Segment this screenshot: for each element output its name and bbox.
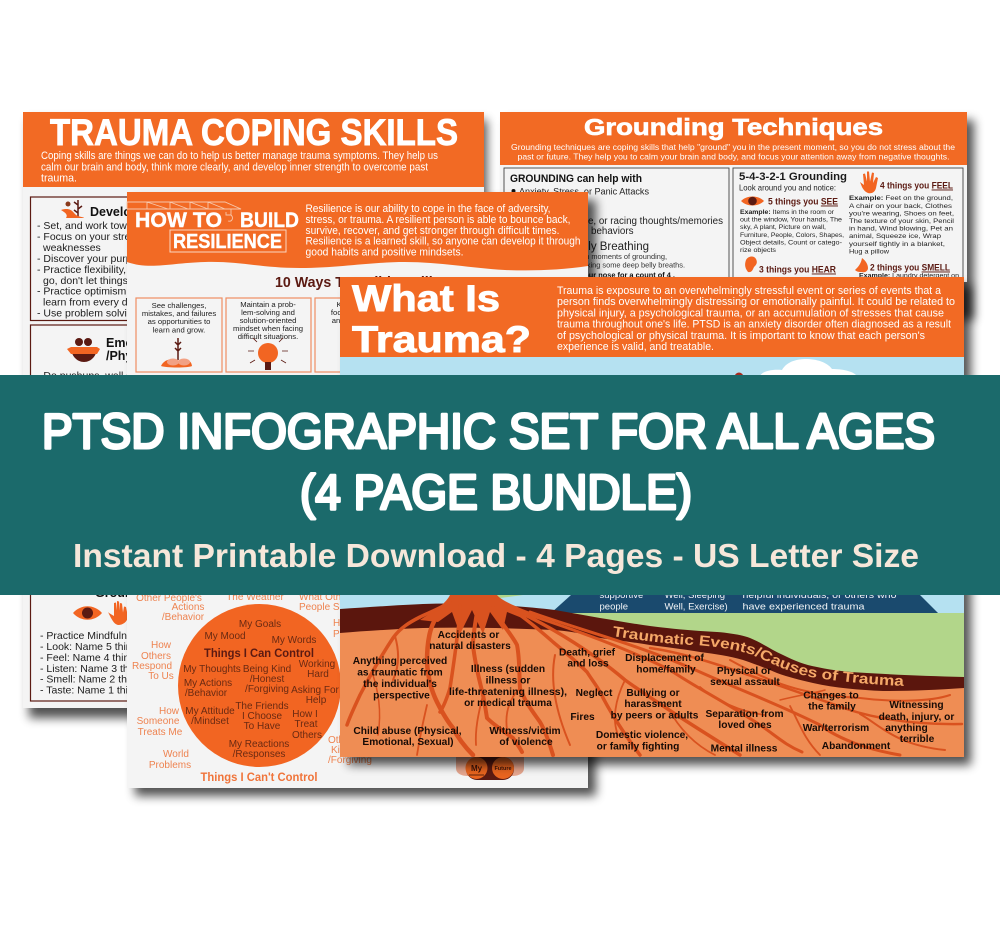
title: what is trauma: Trauma?	[352, 319, 531, 360]
list item: anxiety: Anxiety, Stress, or Panic Attacks	[519, 186, 649, 198]
labels: inside circle: /Honest	[250, 674, 284, 685]
illustration: sky, hill and soil	[340, 357, 964, 757]
card: see challenges: learn and grow.	[153, 326, 205, 334]
panel: Trauma Coping Skills page	[23, 112, 487, 718]
labels: inside circle: Asking For	[291, 685, 340, 696]
labels: outside circle: /Forgiving	[328, 755, 372, 766]
icon: my future tree	[456, 757, 524, 780]
text: trauma definition: experience is valid, and treatable.	[557, 341, 714, 353]
icon: red flower top	[735, 372, 743, 375]
text: see example: rize objects	[740, 247, 777, 254]
card: keep focused: Keep yourself	[336, 300, 384, 309]
labels: causes of trauma: natural disasters	[429, 641, 511, 652]
text: trauma definition: trauma throughout one's life. PTSD is an anxiety disorder often diagnosed as a result	[557, 318, 951, 330]
heading: develop resilience: Develop Resilience	[90, 205, 204, 219]
heading: smell: 2 things you SMELL	[870, 262, 950, 272]
card: keep focused	[315, 298, 405, 372]
icon: plant in hands	[61, 200, 84, 218]
labels: outside circle	[132, 592, 372, 771]
text: feel example	[849, 195, 955, 256]
list: grounding senses: - Feel: Name 4 things you feel	[40, 652, 180, 664]
labels: inside circle: /Mindset	[191, 716, 229, 727]
text: belly breathing description: In moments of grounding,	[583, 252, 667, 261]
icon: my future tree: My	[471, 764, 483, 773]
labels: outside circle: Kind	[331, 745, 351, 756]
text: see example: sky, A plant, Picture on wall,	[740, 224, 826, 231]
banner: bundle title	[0, 375, 1000, 595]
icon: crane truss	[127, 202, 241, 221]
labels: causes of trauma: Physical or	[717, 666, 771, 677]
labels: inside circle: Being Kind	[243, 664, 291, 675]
icon: plant in hands	[161, 338, 192, 368]
labels: inside circle: Treat	[295, 719, 318, 730]
card: keep focused: for what	[346, 324, 375, 333]
list: resilience tips: - Practice flexibility, stay calm, let	[37, 264, 190, 276]
text: protective factors	[600, 595, 896, 612]
icon: my future tree: Future	[494, 766, 512, 772]
title: grounding techniques: Grounding Techniques	[584, 114, 883, 140]
labels: causes of trauma: terrible	[900, 734, 935, 745]
text: trauma definition: Trauma is exposure to an overwhelmingly stressful event or series of events that a	[557, 285, 942, 297]
card: keep focused: focused on goals	[331, 308, 389, 317]
title: build: BUILD	[240, 209, 299, 232]
labels: causes of trauma: Anything perceived	[353, 656, 447, 667]
title: resilience badge: RESILIENCE	[173, 231, 282, 253]
labels: inside circle: My Actions	[184, 678, 232, 689]
soil: brown band	[340, 603, 964, 691]
heading: grounding: Grounding	[95, 586, 159, 600]
text: feel example: The texture of your skin, Pencil	[849, 218, 955, 225]
heading: see: 5 things you SEE	[768, 196, 838, 206]
text: grounding intro: past or future. They help you to calm your brain and body, and focus your attention away from negative thoughts.	[518, 152, 950, 162]
heading: emotional physical: Emotional	[106, 336, 166, 350]
icon: cloud	[760, 359, 857, 376]
tree roots	[347, 595, 962, 755]
labels: outside circle: How	[159, 706, 180, 717]
card: problem solving mindset	[226, 298, 311, 372]
labels: inside circle: /Responses	[233, 749, 285, 760]
heading: traumatic events path: Traumatic Events/Causes of Trauma	[614, 626, 904, 686]
labels: causes of trauma: War/terrorism	[803, 723, 869, 734]
list: resilience tips	[37, 220, 200, 320]
list: grounding senses: - Practice Mindfulness	[40, 630, 143, 642]
text: protective factors: people	[600, 602, 628, 612]
box: grounding can help with	[504, 168, 729, 282]
labels: causes of trauma: the family	[808, 702, 856, 712]
list: resilience tips: - Practice optimism, stay positive,	[37, 286, 193, 298]
labels: inside circle: /Forgiving	[245, 684, 289, 695]
labels: outside circle: Treats Me	[138, 727, 183, 738]
text: protective factors: Well, Exercise)	[664, 602, 728, 612]
labels: causes of trauma: harassment	[624, 699, 682, 710]
text: feel example: you're wearing, Shoes on feet,	[849, 210, 954, 218]
labels: inside circle: Hard	[307, 669, 329, 680]
heading: things I can't control: Things I Can't Control	[200, 770, 318, 784]
card: see challenges: as opportunities to	[148, 317, 210, 326]
labels: outside circle: World	[163, 749, 189, 760]
list: grounding senses: - Listen: Name 3 things you hear	[40, 663, 192, 675]
text: coping skills intro: Coping skills are things we can do to help us better manage trauma symptoms. They help us	[41, 150, 438, 162]
soil: orange ground	[340, 620, 964, 757]
labels: inside circle: My Attitude	[185, 706, 235, 717]
text: resilience definition: good habits and positive mindsets.	[306, 246, 464, 258]
text: resilience definition: Resilience is our ability to cope in the face of adversity,	[306, 203, 551, 215]
icon: ear	[745, 256, 757, 272]
labels: outside circle: People	[333, 629, 365, 640]
panel: How to Build Resilience page	[127, 192, 596, 796]
labels: causes of trauma: Witnessing	[889, 700, 944, 711]
text: trauma definition: person finds overwhelmingly distressing or emotionally painful. It could be related to	[557, 296, 955, 308]
text: protective factors: helpful individuals, or others who	[742, 590, 896, 601]
labels: causes of trauma: illness or	[486, 676, 530, 686]
panel: What Is Trauma page	[340, 277, 979, 773]
title: trauma coping skills: TRAUMA COPING SKILLS	[50, 112, 458, 153]
labels: inside circle: I Choose	[242, 711, 282, 722]
labels: causes of trauma: Child abuse (Physical,	[353, 726, 462, 737]
labels: causes of trauma: death, injury, or	[879, 712, 954, 723]
text: feel example: Example: Feet on the ground,	[849, 195, 953, 202]
list: grounding senses	[40, 630, 193, 696]
text: feel example: in hand, Wind blowing, Pet an	[849, 226, 953, 232]
labels: causes of trauma	[353, 630, 954, 754]
text: grounding intro: Grounding techniques are coping skills that help "ground" you in the present moment, so you do not stress about the	[511, 142, 955, 152]
list: resilience tips: - Discover your purpose	[37, 253, 149, 265]
labels: outside circle: Problems	[149, 760, 191, 771]
icon: eye	[73, 606, 102, 620]
labels: causes of trauma: Neglect	[576, 688, 613, 699]
list: resilience tips: - Set, and work towards goals	[37, 220, 175, 232]
labels: outside circle: How	[151, 640, 172, 651]
labels: inside circle: Others	[292, 730, 322, 741]
text: coping skills intro: trauma.	[41, 172, 77, 184]
text: see example	[740, 209, 844, 254]
text: see example: Furniture, People, Colors, Shapes,	[740, 232, 844, 239]
list item: behaviors: behaviors	[591, 226, 634, 237]
labels: inside circle: The Friends	[235, 701, 289, 712]
labels: causes of trauma: Changes to	[803, 690, 859, 702]
labels: causes of trauma: by peers or adults	[611, 710, 699, 722]
text: belly breathing description: through your nose for a count of 4 ,	[550, 270, 675, 280]
text: trauma definition: of psychological or physical trauma. It is important to know that each person's	[557, 330, 925, 342]
text: feel example: Hug a pillow	[849, 248, 889, 256]
labels: inside circle: How I	[292, 709, 318, 720]
text: resilience definition: stress, or trauma. A resilient person is able to bounce back,	[306, 214, 571, 226]
icon: hand	[860, 172, 878, 193]
labels: causes of trauma: or medical trauma	[464, 698, 552, 709]
labels: causes of trauma: as traumatic from	[357, 668, 443, 678]
chart: things I can control circle	[178, 604, 341, 767]
labels: causes of trauma: Bullying or	[626, 688, 680, 699]
labels: outside circle: Others	[141, 651, 171, 662]
icon: smiling face	[67, 338, 100, 362]
text: protective factors: Well, Sleeping	[664, 590, 725, 601]
heading: things I can control: Things I Can Control	[204, 648, 314, 660]
icon: nose	[855, 258, 868, 272]
text: look around: Look around you and notice:	[739, 182, 836, 192]
labels: causes of trauma: anything	[885, 723, 928, 734]
text: resilience definition	[306, 203, 581, 258]
labels: outside circle: The Weather	[226, 592, 284, 603]
heading: 4 page bundle: (4 PAGE BUNDLE)	[300, 466, 692, 520]
labels: inside circle	[183, 619, 340, 760]
labels: causes of trauma: loved ones	[718, 720, 772, 731]
icon: hand	[108, 601, 128, 625]
infographic bundle preview	[0, 112, 1000, 804]
text: see example: out the window, Your hands, The	[740, 216, 842, 224]
text: smell example: Example: Laundry detergent on	[859, 272, 959, 280]
hill: green	[497, 595, 964, 680]
text: feel example: yourself tightly in a blanket,	[849, 241, 945, 248]
labels: causes of trauma: life-threatening illness),	[449, 687, 567, 698]
list: grounding senses: - Taste: Name 1 thing you taste	[40, 684, 185, 696]
heading: belly breathing: Belly Breathing	[572, 241, 649, 253]
text: resilience definition: survive, recover, and get stronger through difficult times.	[306, 225, 560, 237]
labels: causes of trauma: Mental illness	[711, 744, 778, 754]
heading: PTSD infographic set: PTSD INFOGRAPHIC SET FOR ALL AGES	[42, 405, 935, 459]
text: coping skills intro: calm our brain and body, think more clearly, and develop inner strength to overcome past	[41, 162, 428, 174]
panel: Grounding Techniques page	[500, 112, 974, 320]
labels: inside circle: /Behavior	[185, 688, 228, 699]
labels: causes of trauma: Accidents or	[438, 630, 499, 641]
labels: causes of trauma: perspective	[373, 690, 430, 702]
text: grounding intro	[511, 142, 955, 162]
text: see example: Object details, Count or catego-	[740, 240, 842, 246]
title: what is trauma	[352, 278, 531, 360]
card: see challenges: See challenges,	[152, 301, 206, 310]
trapezoid: protective factors	[551, 595, 938, 613]
list: resilience tips: weaknesses	[42, 242, 101, 254]
heading: physical: /Physical	[106, 349, 160, 363]
text: trauma definition	[557, 285, 955, 353]
list: grounding senses: - Smell: Name 2 things you smell	[40, 674, 193, 686]
list: grounding senses: - Look: Name 5 things you see	[40, 641, 183, 653]
heading: feel: 4 things you FEEL	[880, 180, 953, 190]
labels: outside circle: What Other	[299, 592, 351, 603]
labels: causes of trauma: or family fighting	[597, 742, 679, 752]
card: see challenges	[136, 298, 222, 372]
labels: causes of trauma: Witness/victim	[489, 726, 561, 737]
card: problem solving mindset: mindset when facing	[233, 324, 303, 333]
text: resilience definition: Resilience is a learned skill, so anyone can develop it through	[306, 236, 581, 248]
list item: pushups: - Do pushups, wall sits	[37, 370, 142, 382]
labels: outside circle: Respond	[132, 661, 172, 672]
labels: outside circle: /Behavior	[162, 612, 205, 623]
labels: inside circle: My Reactions	[229, 739, 289, 750]
labels: causes of trauma: Illness (sudden	[471, 664, 545, 675]
card: keep focused: and control what	[332, 316, 389, 325]
labels: causes of trauma: and loss	[567, 658, 609, 670]
labels: inside circle: Working	[299, 659, 335, 670]
labels: outside circle: Someone	[137, 716, 180, 727]
list: resilience tips: learn from every difficulty	[43, 296, 160, 308]
labels: outside circle: Actions	[172, 602, 204, 613]
icon: light bulb	[248, 338, 288, 370]
labels: causes of trauma: Emotional, Sexual)	[362, 737, 454, 748]
list item: racing thoughts: Intrusive, or racing thoughts/memories	[556, 216, 723, 227]
labels: outside circle: To Us	[148, 671, 174, 682]
labels: causes of trauma: Abandonment	[822, 741, 891, 752]
box: emotional physical and grounding lists	[30, 325, 476, 701]
labels: causes of trauma: home/family	[636, 664, 696, 676]
card: problem solving mindset: solution-oriented	[240, 316, 296, 325]
box: develop resilience list	[30, 197, 476, 320]
title: how to build: HOW TO	[135, 209, 222, 232]
text: see example: Example: Items in the room or	[740, 209, 835, 216]
title: what is trauma: What Is	[352, 278, 500, 319]
heading: GROUNDING can help with	[510, 173, 642, 185]
labels: causes of trauma: Death, grief	[559, 648, 616, 658]
list: resilience tips: - Use problem solving skills	[37, 308, 164, 320]
list: resilience tips: - Focus on your strengths, not your	[37, 231, 200, 243]
text: trauma definition: physical injury, a psychological trauma, or an accumulation of stresses that cause	[557, 308, 944, 320]
card: see challenges: mistakes, and failures	[142, 309, 216, 318]
box: 5-4-3-2-1 grounding	[733, 168, 963, 282]
labels: causes of trauma: Domestic violence,	[596, 730, 688, 741]
labels: inside circle: Help	[306, 695, 327, 706]
heading: 5-4-3-2-1: 5-4-3-2-1 Grounding	[739, 171, 847, 183]
heading: hear: 3 things you HEAR	[759, 264, 836, 274]
text: coping skills intro	[41, 150, 438, 184]
text: protective factors: have experienced trauma	[742, 602, 865, 612]
card: problem solving mindset: Maintain a prob-	[240, 300, 296, 309]
card: problem solving mindset: lem-solving and	[241, 308, 295, 317]
subtitle: instant printable download: Instant Printable Download - 4 Pages - US Letter Size	[73, 537, 919, 574]
text: belly breathing description	[550, 252, 685, 280]
labels: causes of trauma: of violence	[499, 737, 553, 748]
text: belly breathing description: try taking some deep belly breaths.	[570, 260, 685, 270]
labels: outside circle: People Say	[299, 602, 350, 613]
labels: inside circle: To Have	[244, 721, 281, 732]
text: protective factors: supportive	[600, 590, 643, 601]
heading: 10 ways: 10 Ways To Build Resilience	[275, 275, 465, 291]
card: problem solving mindset: difficult situations.	[238, 332, 298, 341]
text: feel example: animal, Squeeze ice, Wrap	[849, 233, 941, 240]
icon: eye	[741, 196, 764, 206]
labels: outside circle: Other People's	[136, 593, 202, 604]
text: feel example: A chair on your back, Clothes	[849, 203, 953, 210]
labels: inside circle: My Goals	[239, 619, 281, 630]
labels: outside circle: Others	[328, 735, 358, 746]
labels: causes of trauma: Separation from	[705, 709, 784, 720]
labels: inside circle: My Thoughts	[183, 664, 241, 675]
labels: causes of trauma: sexual assault	[710, 677, 780, 688]
list: resilience tips: go, don't let things bother you	[43, 275, 181, 287]
labels: causes of trauma: Displacement of	[625, 653, 704, 664]
labels: inside circle: My Words	[272, 635, 316, 646]
labels: outside circle: How	[333, 618, 354, 629]
labels: causes of trauma: the individual's	[363, 679, 437, 690]
labels: causes of trauma: Fires	[570, 712, 595, 723]
labels: inside circle: My Mood	[204, 631, 246, 642]
